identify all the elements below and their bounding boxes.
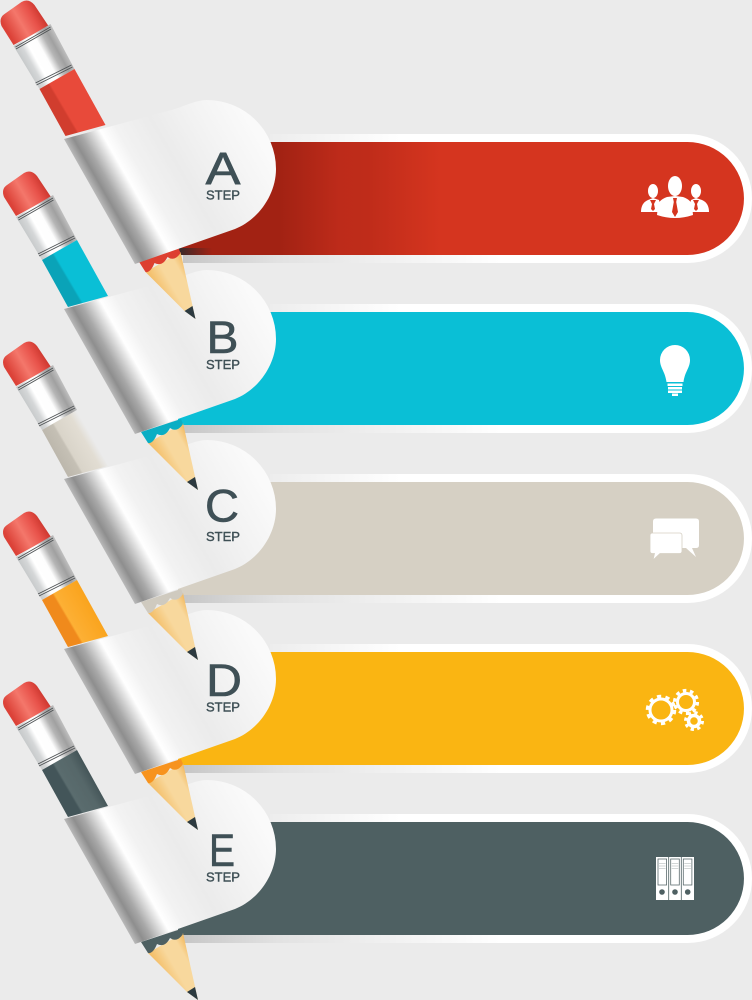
step A row <box>0 1 752 319</box>
step D banner <box>178 644 752 773</box>
icon: speech bubbles <box>650 518 699 560</box>
step A label: STEP <box>206 188 240 202</box>
step B ribbon <box>64 270 276 434</box>
icon: business team <box>641 176 709 218</box>
icon: light bulb <box>660 345 690 396</box>
step D row <box>3 512 752 830</box>
step C letter: C <box>205 480 239 532</box>
step C ribbon <box>64 440 276 604</box>
step B pencil <box>3 172 198 490</box>
step A banner <box>178 134 752 263</box>
step C pencil <box>3 342 198 660</box>
step C label: STEP <box>206 529 240 544</box>
step E label: STEP <box>206 870 240 884</box>
step A letter: A <box>206 143 240 194</box>
step E row <box>3 682 752 1000</box>
step E ribbon <box>64 780 276 944</box>
step C banner <box>178 474 752 603</box>
step A pencil <box>0 1 196 319</box>
step B letter: B <box>206 312 238 363</box>
step D ribbon <box>64 610 276 774</box>
step D letter: D <box>206 655 242 706</box>
step E letter: E <box>209 825 235 876</box>
step C row <box>3 342 752 660</box>
icon: binders <box>656 857 694 900</box>
step A ribbon <box>64 100 276 264</box>
icon: gears <box>648 690 702 730</box>
step D pencil <box>3 512 198 830</box>
step B row <box>3 172 752 490</box>
step D label: STEP <box>206 700 240 714</box>
step E banner <box>178 814 752 943</box>
step B banner <box>178 304 752 433</box>
step B label: STEP <box>206 357 240 372</box>
step E pencil <box>3 682 198 1000</box>
